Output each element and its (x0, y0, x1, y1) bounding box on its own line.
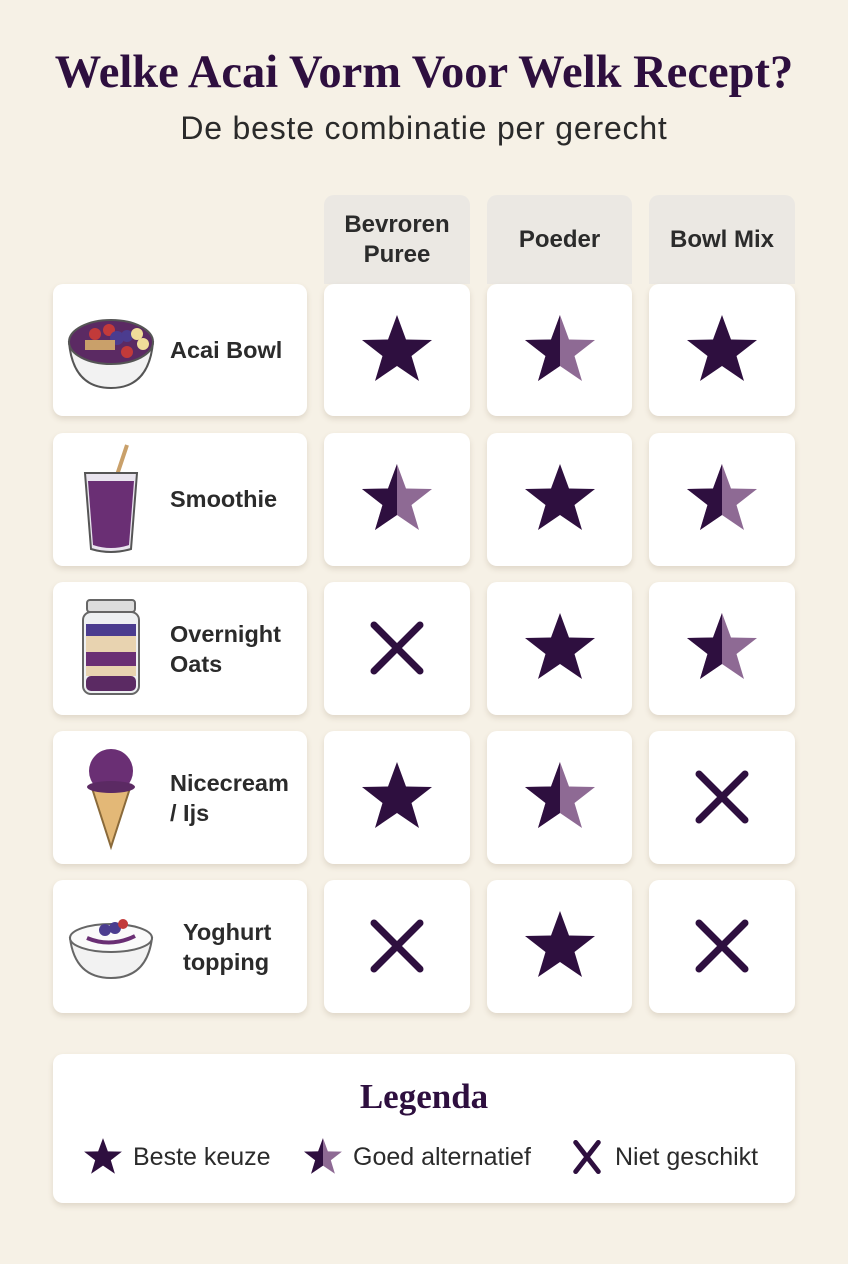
cell: half star (487, 731, 632, 864)
legend item: alternative: Goed alternatief (353, 1142, 531, 1170)
legend panel (53, 1054, 795, 1203)
cell: cross (649, 731, 795, 864)
cell: half star (324, 433, 470, 566)
cell: full star (487, 880, 632, 1013)
subtitle: De beste combinatie per gerecht (180, 110, 668, 146)
label: Acai Bowl (170, 337, 282, 363)
column header: Bowl Mix: Bowl Mix (670, 226, 774, 252)
label: topping (183, 949, 269, 975)
icon: jar (82, 599, 140, 695)
label (170, 770, 289, 826)
row: Nicecream (53, 731, 307, 864)
label: / Ijs (170, 800, 209, 826)
legend title: Legenda (360, 1077, 488, 1116)
cell: cross (649, 880, 795, 1013)
row: Smoothie (53, 433, 307, 566)
legend item: best: Beste keuze (133, 1142, 271, 1170)
title: Welke Acai Vorm Voor Welk Recept? (55, 47, 793, 98)
label: Overnight (170, 621, 281, 647)
cell: full star (487, 582, 632, 715)
legend item: not suitable (573, 1140, 758, 1174)
column header: Bevroren Puree (324, 195, 470, 284)
icon: ice cream cone (87, 749, 135, 850)
column header: Bowl Mix (649, 195, 795, 284)
label (170, 621, 281, 677)
column header: Bevroren Puree: Puree (364, 240, 430, 268)
cell: full star (324, 284, 470, 416)
label: Smoothie (170, 486, 277, 512)
label: Oats (170, 651, 222, 677)
label: Yoghurt (183, 919, 271, 945)
label (183, 919, 272, 975)
cell: full star (649, 284, 795, 416)
cell: cross (324, 582, 470, 715)
icon: acai bowl (68, 319, 154, 389)
column header: Bevroren Puree: Bevroren (344, 210, 450, 238)
legend item: best (84, 1138, 271, 1174)
legend item: alternative (304, 1138, 531, 1174)
column header: Poeder: Poeder (519, 226, 600, 252)
icon: smoothie glass (84, 444, 138, 553)
row: Yoghurt topping (53, 880, 307, 1013)
row: Overnight Oats (53, 582, 307, 715)
cell: full star (324, 731, 470, 864)
cell: half star (649, 433, 795, 566)
cell: half star (649, 582, 795, 715)
label: Nicecream (170, 770, 289, 796)
cell: cross (324, 880, 470, 1013)
icon: yoghurt bowl (68, 919, 154, 979)
legend item: not suitable: Niet geschikt (615, 1142, 758, 1170)
cell: full star (487, 433, 632, 566)
row: Acai Bowl (53, 284, 307, 416)
cell: half star (487, 284, 632, 416)
column header: Poeder (487, 195, 632, 284)
